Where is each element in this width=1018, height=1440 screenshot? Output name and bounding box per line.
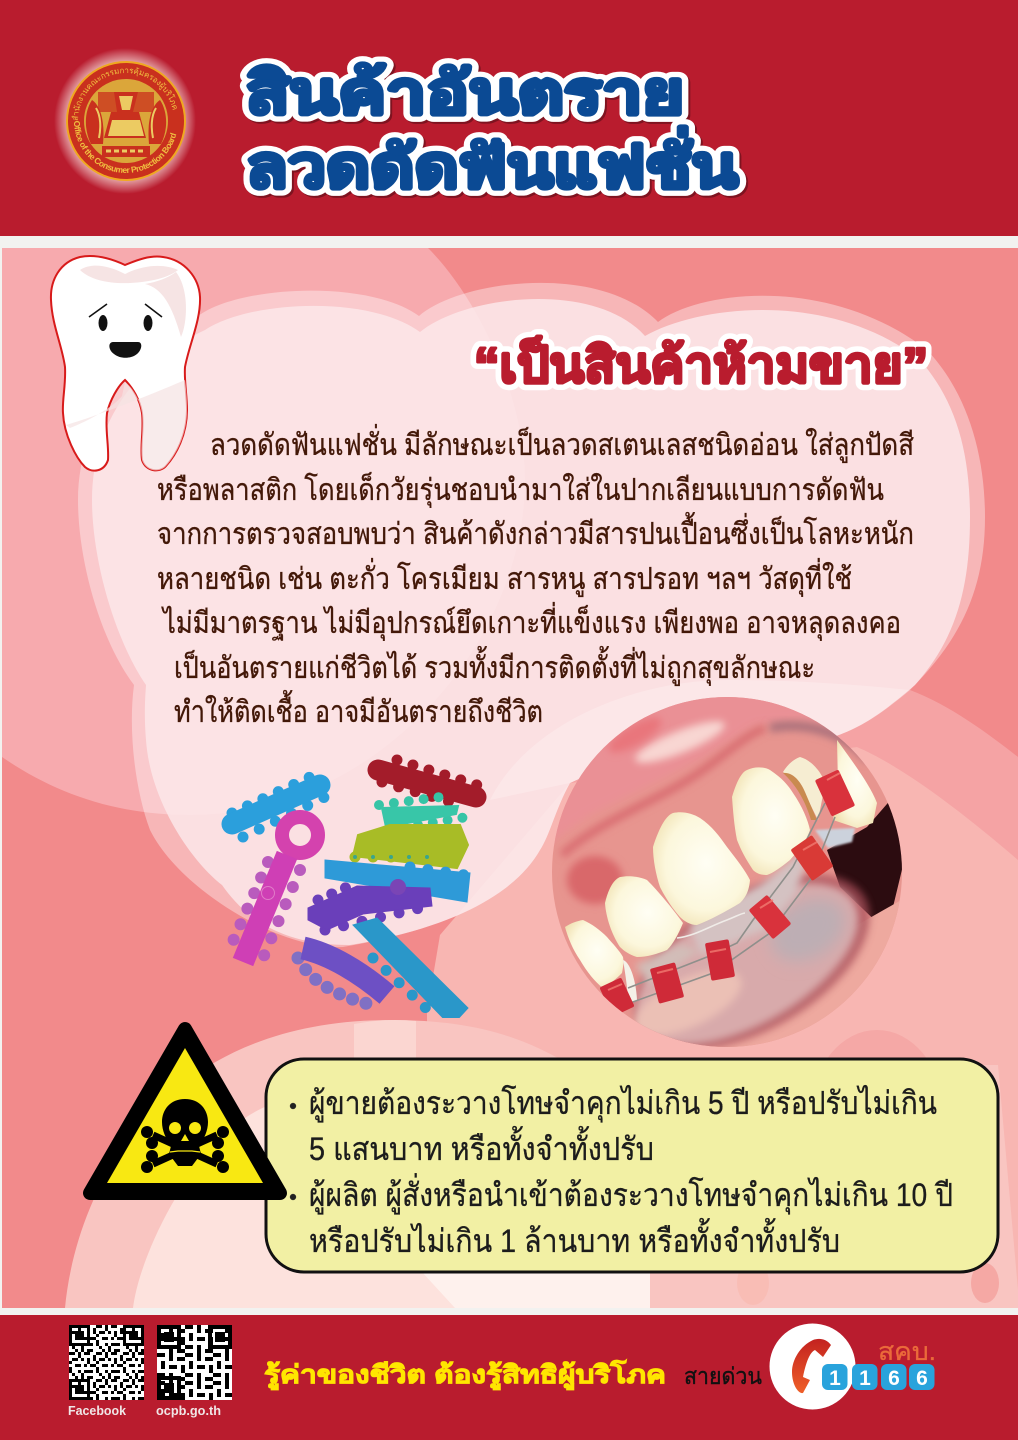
- main panel background: [2, 248, 1018, 1308]
- purple band: [308, 879, 432, 930]
- seal logo: [55, 49, 195, 193]
- blue band middle: [325, 860, 470, 902]
- lateral tooth: [605, 876, 683, 957]
- number tiles: 1: [859, 1367, 871, 1390]
- title: สินค้าอันตราย: [248, 63, 686, 128]
- penalty text: 5 แสนบาท หรือทั้งจำทั้งปรับ: [309, 1126, 654, 1167]
- red band: [378, 760, 477, 806]
- mouth shadow: [827, 803, 902, 917]
- seal logo: สำนักงานคณะกรรมการคุ้มครองผู้บริโภค: [72, 67, 177, 120]
- violet band: [298, 948, 387, 1006]
- far teeth: [783, 757, 825, 820]
- subheading: “เป็นสินค้าห้ามขาย”: [474, 335, 928, 393]
- slogan: รู้ค่าของชีวิต ต้องรู้สิทธิผู้บริโภค: [264, 1359, 666, 1391]
- lower lobe overlay: [490, 680, 1018, 860]
- qr code: Facebook: Facebook: [68, 1403, 127, 1418]
- body paragraph: เป็นอันตรายแก่ชีวิตได้ รวมทั้งมีการติดตั้งที่ไม่ถูกสุขลักษณะ: [174, 646, 815, 687]
- body paragraph: [157, 424, 914, 729]
- heart cloud inner: [92, 299, 970, 945]
- heart cloud outer: [78, 283, 985, 947]
- blue stick band: [353, 918, 468, 1020]
- footer band: [0, 1315, 1018, 1440]
- title: สินค้าอันตราย: [246, 61, 684, 126]
- number tiles: 6: [916, 1367, 928, 1390]
- canine tooth: [565, 920, 623, 988]
- icon: telephone: [792, 1339, 831, 1393]
- body paragraph: หลายชนิด เช่น ตะกั่ว โครเมียม สารหนู สารปรอท ฯลฯ วัสดุที่ใช้: [157, 558, 852, 598]
- penalty text: หรือปรับไม่เกิน 1 ล้านบาท หรือทั้งจำทั้งปรับ: [309, 1218, 840, 1259]
- skull and crossbones: [141, 1099, 229, 1173]
- tooth mascot: [51, 256, 200, 471]
- pink key band: [230, 817, 318, 962]
- warning triangle: [90, 1029, 280, 1193]
- qr code: website: [156, 1325, 232, 1418]
- qr code: Facebook: [68, 1325, 144, 1418]
- qr code: website: ocpb.go.th: [156, 1403, 221, 1418]
- body paragraph: ลวดดัดฟันแฟชั่น มีลักษณะเป็นลวดสเตนเลสชนิดอ่อน ใส่ลูกปัดสี: [210, 424, 914, 463]
- hotline label: สายด่วน: [684, 1363, 762, 1389]
- seal logo: Office of the Consumer Protection Board: [74, 121, 176, 173]
- title: ลวดดัดฟันแฟชั่น: [246, 126, 738, 200]
- blue band top left: [232, 777, 325, 837]
- photo: coloured elastic bands: [230, 760, 477, 1020]
- penalty text: [290, 1085, 953, 1259]
- body paragraph: จากการตรวจสอบพบว่า สินค้าดังกล่าวมีสารปนเปื้อนซึ่งเป็นโลหะหนัก: [157, 512, 914, 551]
- header band: [0, 0, 1018, 236]
- number tiles: 1: [829, 1367, 841, 1390]
- green band: [353, 825, 468, 868]
- hotline badge: [770, 1324, 936, 1410]
- number tiles: [822, 1364, 934, 1390]
- body paragraph: หรือพลาสติก โดยเด็กวัยรุ่นชอบนำมาใส่ในปากเลียนแบบการดัดฟัน: [157, 471, 884, 509]
- agency abbreviation: สคบ.: [878, 1338, 936, 1366]
- subheading: “เป็นสินค้าห้ามขาย”: [474, 335, 928, 393]
- penalty text: ผู้ขายต้องระวางโทษจำคุกไม่เกิน 5 ปี หรือปรับไม่เกิน: [309, 1085, 937, 1123]
- title: ลวดดัดฟันแฟชั่น: [248, 128, 740, 202]
- tooth face: [89, 304, 162, 358]
- lips and gums: [556, 697, 865, 908]
- body paragraph: ไม่มีมาตรฐาน ไม่มีอุปกรณ์ยึดเกาะที่แข็งแรง เพียงพอ อาจหลุดลงคอ: [161, 602, 901, 642]
- incisor left: [653, 812, 750, 925]
- teal band: [379, 797, 467, 827]
- archwire: [628, 803, 835, 1003]
- penalty box: [266, 1059, 998, 1272]
- title: [246, 61, 740, 202]
- body paragraph: ทำให้ติดเชื้อ อาจมีอันตรายถึงชีวิต: [174, 690, 543, 729]
- brackets: [599, 769, 855, 1017]
- incisor right: [732, 767, 810, 875]
- photo: teeth with braces: [552, 697, 902, 1047]
- title: สินค้าอันตราย: [246, 61, 684, 126]
- penalty text: ผู้ผลิต ผู้สั่งหรือนำเข้าต้องระวางโทษจำคุกไม่เกิน 10 ปี: [309, 1173, 953, 1215]
- tongue and lower lip: [630, 871, 900, 1047]
- retainer wire: [677, 913, 745, 938]
- title: ลวดดัดฟันแฟชั่น: [246, 126, 738, 200]
- number tiles: 6: [888, 1367, 900, 1390]
